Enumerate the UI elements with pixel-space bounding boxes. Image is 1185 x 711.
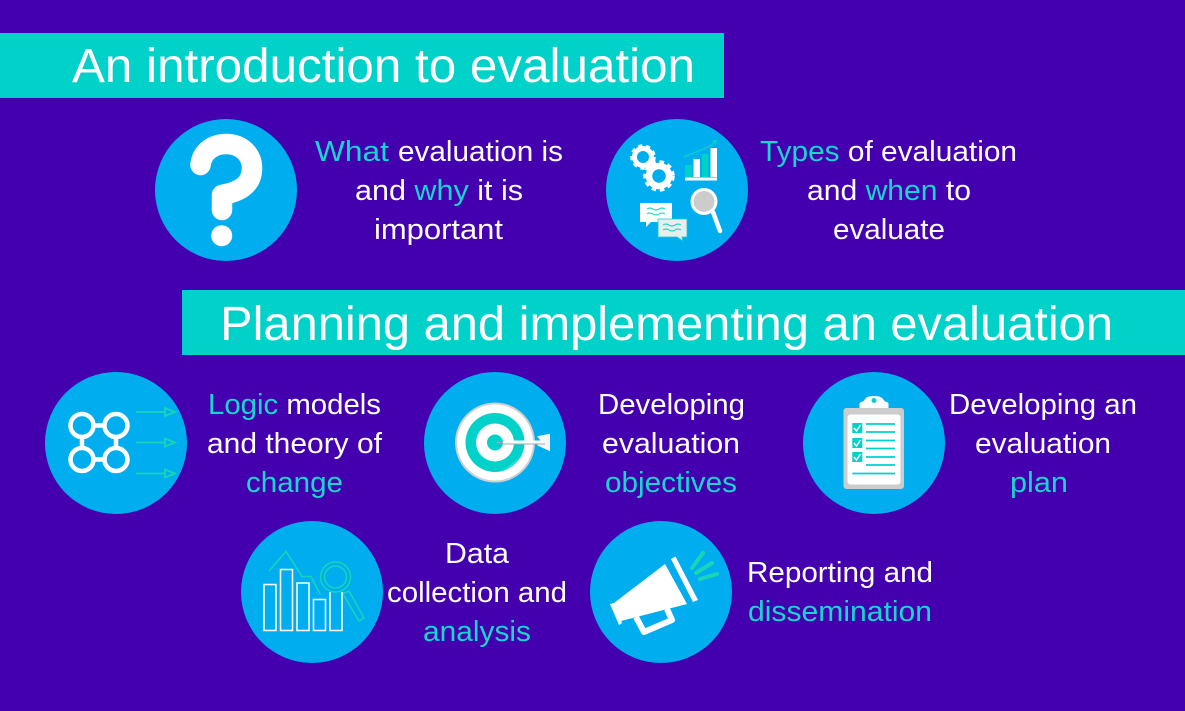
text: what evaluation is and why it is important: What (315, 136, 389, 168)
text: reporting and dissemination (747, 557, 933, 628)
text: data collection and analysis (387, 538, 567, 648)
text: what evaluation is and why it is important (315, 136, 563, 246)
text: developing an evaluation plan: Developing an (949, 389, 1137, 421)
text: data collection and analysis: collection and (387, 577, 567, 609)
item: data collection (241, 521, 567, 663)
heading: An introduction to evaluation (0, 33, 724, 98)
text: logic models and theory of change (207, 389, 382, 499)
text: types of evaluation and when to evaluate: Types of evaluation (760, 136, 1017, 168)
text: logic models and theory of change: Logic models (208, 389, 381, 421)
item: what evaluation is (155, 119, 563, 261)
text: types of evaluation and when to evaluate: evaluate (833, 214, 945, 246)
text: data collection and analysis: Data (445, 538, 509, 570)
icon: logic model nodes and arrows (45, 372, 187, 514)
text: types of evaluation and when to evaluate: and when to (807, 175, 971, 207)
text: developing evaluation objectives: evaluation (602, 428, 740, 460)
text: types of evaluation and when to evaluate (760, 136, 1017, 246)
icon: megaphone (590, 521, 732, 663)
text: what evaluation is and why it is important: important (374, 214, 503, 246)
text: developing evaluation objectives: Developing (598, 389, 745, 421)
heading: Planning and implementing an evaluation: Planning and implementing an evaluation (220, 298, 1113, 351)
text: developing an evaluation plan: plan (1010, 467, 1068, 499)
text: what evaluation is and why it is important: evaluation is (398, 136, 563, 168)
text: developing an evaluation plan: evaluation (975, 428, 1111, 460)
text: what evaluation is and why it is important: and why it is (355, 175, 523, 207)
icon: bar chart with magnifier (241, 521, 383, 663)
icon: clipboard checklist (803, 372, 945, 514)
icon: gears, chart, magnifier and speech bubbles (606, 119, 748, 261)
text: data collection and analysis: analysis (423, 616, 531, 648)
icon: question mark (155, 119, 297, 261)
text: logic models and theory of change: change (246, 467, 343, 499)
text: developing an evaluation plan (949, 389, 1137, 499)
heading: An introduction to evaluation: An introduction to evaluation (72, 40, 695, 93)
text: reporting and dissemination: Reporting and (747, 557, 933, 589)
item: types of evaluation (606, 119, 1017, 261)
text: logic models and theory of change: and theory of (207, 428, 382, 460)
item: evaluation objectives (424, 372, 745, 514)
text: developing evaluation objectives: objectives (605, 467, 737, 499)
item: reporting and dissemination (590, 521, 933, 663)
item: evaluation plan (803, 372, 1137, 514)
text: developing evaluation objectives (598, 389, 745, 499)
item: logic models (45, 372, 382, 514)
icon: target with dart (424, 372, 566, 514)
text: reporting and dissemination: dissemination (748, 596, 932, 628)
